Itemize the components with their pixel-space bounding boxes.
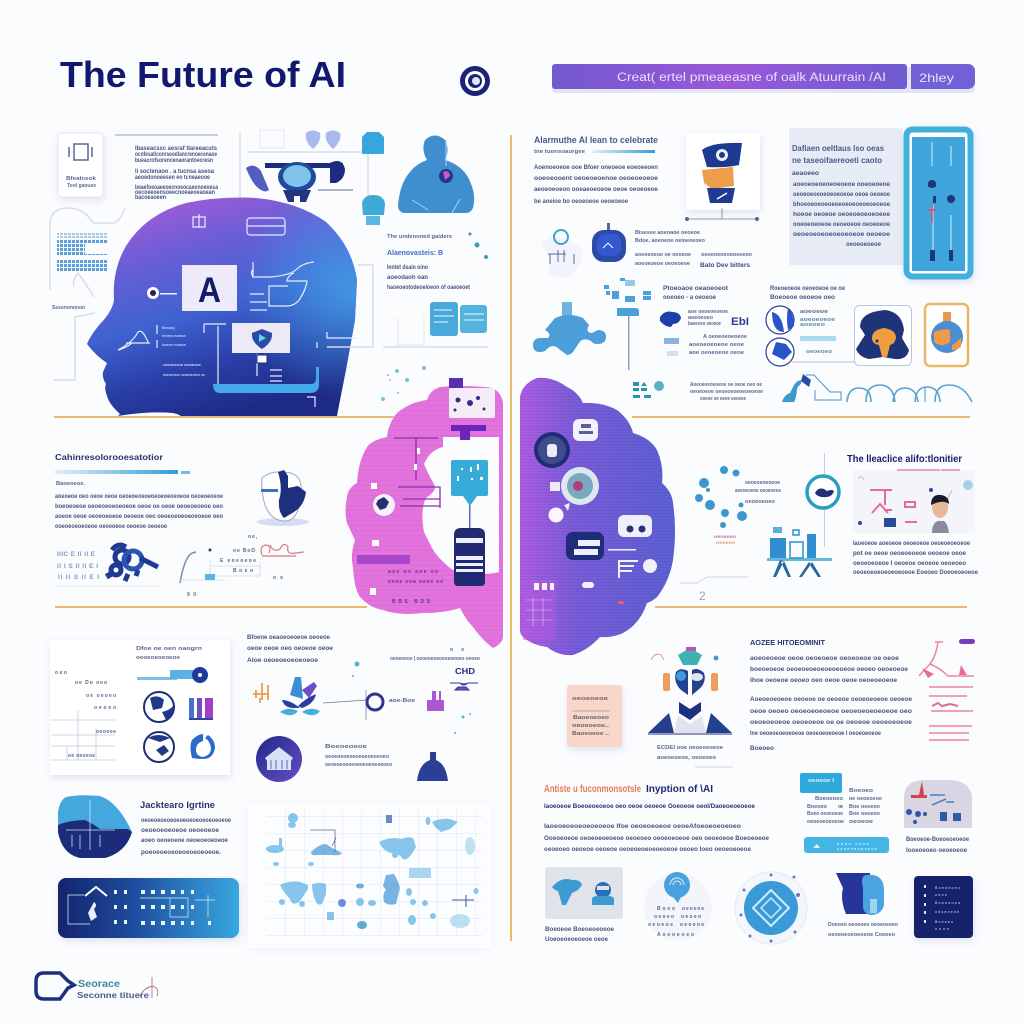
text block: centre right A: A oeoeoeoeoeoe <box>703 334 747 340</box>
icon: large circular badge <box>735 872 807 944</box>
panel: mid left section: aoeoe oeoe oeoeoeoeoe oeoeoe oeo oeoeoeoeoeoeoeoe oeo <box>55 513 223 520</box>
text block: top left: beaefoeoaeeoecnoeocaeonoeoesa <box>135 184 218 191</box>
text block: lower left <box>140 800 231 856</box>
panel: cyan mini tiles: Boeoeo <box>807 804 827 810</box>
panel: lab image <box>904 780 972 854</box>
brain: connector <box>469 505 470 529</box>
icon: source logo <box>36 973 74 999</box>
chart: small line chart: oe, <box>248 534 258 540</box>
panel: lower left table card: oeoeoe <box>96 729 116 735</box>
panel: lower centre text and flow: aoe-Boe <box>389 698 415 704</box>
panel: grey text panel: oeoeoeoeoeoeoeoeoe oeoeoe <box>793 231 890 238</box>
panel: right section infographic: The lleaclice alifo:tlonitier <box>847 454 962 465</box>
panel: grey text panel: ooeoeoeoeoe oeoeoeoe oeoeoeoe <box>793 221 890 228</box>
text block: impact body: Ooeoeoeoe oeoeoeoeoeoe oeoeoeo oeoeoeoeoe oeo oeoeoeoe Boeoeoeoe <box>544 835 769 842</box>
text block: lower right article <box>750 638 912 752</box>
top banner: 2hley <box>919 71 954 85</box>
icon: navy and cyan shape <box>828 873 898 938</box>
panel: right section infographic <box>847 454 978 576</box>
icon: shield sculpture <box>257 470 309 526</box>
brain: navy database tile <box>454 528 485 586</box>
brain: dark disc icon <box>534 432 570 468</box>
text block: lower right article: aoeoeoeoe oeoe oeoeoeoe oeoeoeoe oe oeoe <box>750 655 899 662</box>
text block: lower right article: oeoe oeoeo oeoeoeoeoeoe oeoeoeoeoeoeoe oeo <box>750 708 912 715</box>
panel: chat icon and labels: oeoeo <box>654 914 674 920</box>
panel: top left card: Tool gaouee <box>67 183 96 189</box>
panel: top left card <box>58 133 103 197</box>
panel: chat icon and labels <box>644 872 712 941</box>
panel: cyan mini tiles: oe <box>838 804 843 810</box>
top right labels: oeoeoeoe | oeoeoeoeoeoeoeoeo oeoeo <box>390 656 480 662</box>
chart: small line chart: 9 0 <box>187 592 196 598</box>
panel: cyan mini tiles <box>800 773 889 853</box>
icon: desk figures: 2 <box>699 589 706 603</box>
panel: mid left section: aoeoeoe oeo oeoe oeoe oeoeoeoeoeoeoeoeoeoeoe oeoeoeoeoe <box>55 493 223 500</box>
text block: centre right B with discs: Roeoeoeoe oeoeoeoe oe oe <box>770 285 845 292</box>
icon: cyan server <box>362 195 385 225</box>
panel: figure card <box>685 133 760 221</box>
panel: cyan mini tiles: Boe oeoeoe <box>849 804 880 810</box>
chart: number grid with navy knot: II II S II E I <box>58 574 99 581</box>
panel: cyan mini tiles: Boeo oeoeoeoe <box>807 811 843 817</box>
panel: chat icon and labels: oeoeoe <box>682 906 704 912</box>
head: letter A box <box>182 265 237 311</box>
panel: orange globe card <box>925 304 968 366</box>
text block: centre right A: aoe oeoeoeoe oeoe <box>689 350 744 356</box>
text block: centre right B with discs: aoeoeoe <box>800 309 828 315</box>
text block: lower left: aoeo oeoeoeoe oeoeoeoeoeoe <box>141 837 228 844</box>
text block: right of head: Inntet dsain oino <box>387 264 428 271</box>
panel: lower left table card: oeoeo <box>94 705 116 711</box>
panel: peach note card <box>567 685 622 747</box>
text block: lower left: oeoeoeoeoeoeoeoeoeoeoeoeoeoe <box>141 817 231 824</box>
text block: top left: ocnfesaticonrseodlancrenoecenaoe <box>135 151 217 158</box>
icon: title emblem <box>460 66 490 96</box>
panel: top right intro text: be aoeioe bo oeoeoeoe oeoeoeoe <box>534 198 628 205</box>
icon: blue person <box>398 136 474 213</box>
panel: navy list card: Boeoeoeo <box>935 886 960 890</box>
panel: mid right ring of blobs: oeoeoeoeoeoe <box>745 480 780 486</box>
heading: impact of AI: Antiste u fuconmonsotsle <box>544 784 641 795</box>
panel: cyan mini tiles: oeoeoe <box>849 819 873 825</box>
text block: pendant notes: Btsesee aoeoaoe oeoeoe <box>635 230 700 236</box>
head: tiny labels: doeoeoeoe oeaeoeoeoe oe <box>163 373 205 377</box>
panel: top right intro text: tne tuonsoaurgee <box>534 149 585 155</box>
head: letter A box: A <box>198 271 221 310</box>
panel: temple circle with caption: Boeoeoeoe <box>325 744 367 750</box>
panel: data table outline <box>50 208 125 380</box>
panel: cyan mini tiles: Boeoeoeo <box>815 796 843 802</box>
text block: top left: bueacrofsorencenaorantoecresn <box>135 157 213 164</box>
panel: right section infographic: Iaoeoeoe aoeoeoe oeoeoeoe oeoeoeoeoeoe <box>853 540 970 547</box>
panel: cyan mini tiles: Boe oeoeoe <box>849 811 880 817</box>
panel: lower left table card <box>50 640 230 775</box>
top right labels: oe <box>450 647 464 653</box>
panel: mid right ring of blobs: oeoeoeo <box>714 534 736 539</box>
text block: centre right A: EbI <box>731 316 749 328</box>
text block: centre right A: Ptoeoaoe oeaoeoeot <box>663 285 729 292</box>
icon: hearts <box>306 130 340 149</box>
chart: number grid with navy knot: II I S II II E I <box>57 563 98 570</box>
panel: cyan mini tiles: oeoeoe I <box>808 778 835 784</box>
icon: person detail <box>412 140 460 213</box>
brain: speech bubble icon <box>573 419 598 441</box>
divider: horizontal gold rules <box>54 416 970 608</box>
text block: right of head: The undenoned gaiders <box>387 234 452 240</box>
text block: top left: li soctenaoo . a tucnsa aseoa <box>135 168 214 175</box>
panel: mid right ring of blobs <box>695 466 781 545</box>
panel: cyan framed tile <box>906 130 970 276</box>
panel: cyan mini tiles: oeoe oeoe <box>837 841 870 846</box>
text block: pendant notes <box>635 230 752 269</box>
icon: lotus <box>280 677 320 715</box>
text block: centre right B with discs: oeoeoeo <box>806 349 832 355</box>
panel: lower centre text and flow: Bfoene oeaoeoeoeoe oeoeoe <box>247 634 330 641</box>
icon: teal cluster <box>633 381 664 398</box>
text block: lower left: oeoeoeoeoeoe oeoeoeoe <box>141 827 219 834</box>
text block: impact body <box>544 803 769 853</box>
panel: chat icon and labels: Boeo <box>657 906 675 912</box>
brain: pink panel detail: aoe oe aoe oe <box>388 569 438 575</box>
head: tiny labels: beoeso eoaeoe <box>162 334 186 338</box>
panel: top right intro text: ooeoeooent oeoeoeoenoe oeoeoeoeoe <box>534 175 658 182</box>
panel: lab image: Iooeoeoeo oeoeoeoe <box>906 847 967 854</box>
panel: chat icon and labels: oeoeoe <box>648 922 673 928</box>
panel: mid left section: ooeoeoeoeoeoe oeoeoeoe oeoeoe oeoeoe <box>55 523 167 530</box>
panel: navy list card: Boeoeo <box>935 920 953 924</box>
text block: lower right article: lne oeoeoeoeoeoeoe oeoeoeoeoeoe I oeoeoeoeoe <box>750 730 881 737</box>
icon: ring with post <box>807 453 839 547</box>
panel: lab image: Boeoeoe-Boeoeoeoeoe <box>906 836 969 843</box>
panel: lower left table card: oeoeoeoeoeoe <box>136 655 180 661</box>
text block: lower right article: AOZEE HITOEOMINIT <box>750 638 825 647</box>
icon: blue tile <box>362 132 384 154</box>
head: tiny labels <box>162 326 205 377</box>
panel: cyan mini tiles: oeoeoeoeoeoe <box>837 846 878 851</box>
panel: right section infographic: pot oe oeoe oeoeoeoeoe oeoeoe oeoe <box>853 550 966 557</box>
panel: navy list card: oeoe <box>935 893 947 897</box>
panel: grey text panel: aeaoeeo <box>792 170 819 177</box>
panel: pink sketches <box>919 639 975 741</box>
panel: grey text panel: oeoeoeoeoeoeoeoeoe oeoe oeoeoe <box>793 191 890 198</box>
panel: right section infographic: oeoeoeoeoe I oeoeoe oeoeoe oeoeoeo <box>853 560 966 567</box>
panel: temple circle with caption <box>256 736 448 782</box>
text block: top left: oecoeeoensoeecnoeaeoeaoean <box>135 189 215 196</box>
panel: map and robot card: Boeoeoe Boeoeoeoeoe <box>545 926 614 933</box>
brain: globe disc icon <box>550 467 599 505</box>
panel: cyan navy blob <box>58 795 132 858</box>
panel: top right intro text: aeoeoeoeon ooeaeoeoeoe oeoe oeoeoeoe <box>534 186 658 193</box>
icon: crane figure <box>782 374 841 402</box>
text block: top left: bacoeaoeen <box>135 194 166 201</box>
panel: lower centre text and flow <box>247 634 480 734</box>
chart: small line chart <box>180 534 304 598</box>
panel: temple circle with caption: oeoeoeoeoeoeoeoeoeoeoeo <box>325 762 392 768</box>
brain: small camera tile <box>618 515 652 537</box>
panel: lower centre text and flow: oeoe oeoe oeo oeoeoe oeoe <box>247 645 333 652</box>
top banner <box>552 64 975 93</box>
head: node connector <box>147 287 177 299</box>
scatter dots <box>381 366 426 401</box>
panel: peach note card: oeoeoeoe.. <box>572 723 610 729</box>
icon: blue pendant <box>592 223 626 262</box>
left pink brain <box>346 378 503 648</box>
chart: number grid with navy knot: IIIC E II II E <box>57 551 96 558</box>
panel: data table outline: Sssonononoo <box>52 305 85 311</box>
slider icon <box>137 667 208 683</box>
text block: bottom caption: Aoeoeoeoeoeoe oe oeoe oeo oe <box>690 382 762 388</box>
panel: navy list card <box>914 876 973 938</box>
head: cyan bracket bar <box>213 367 319 393</box>
heading: impact of AI: Inyption of \AI <box>646 784 713 795</box>
text block: lower right article: boeoeoeoe oeoeoeoeoeoeoeoeoe oeoeo oeoeoeoe <box>750 666 908 673</box>
panel: map and robot card <box>545 867 623 943</box>
icon: arches row <box>846 385 972 402</box>
panel: mid right ring of blobs: oeoeoeoeo <box>745 499 775 505</box>
chart: small line chart: E eoeoeoe <box>220 558 256 564</box>
connector <box>323 690 367 720</box>
text block: lower left: Jacktearo Igrtine <box>140 800 215 810</box>
text block: centre right A: aoe oeoeoeoeoe <box>688 309 728 315</box>
panel: lower left table card: oe Do oeo <box>75 680 107 686</box>
text block: pendant notes: Bdoe, aoeoeoe oeioeoeoeo <box>635 238 705 244</box>
panel: top centre device illustration <box>240 130 385 225</box>
brain: white node <box>548 503 570 522</box>
text block: pendant notes: oeoeoeoeoeoeoeoe <box>701 252 752 258</box>
text block: centre right A: baoeoeo oeoeoe <box>688 321 721 327</box>
brain: white cutout <box>422 437 499 574</box>
icon: blue document card <box>327 265 488 347</box>
panel: lower left table card: oe oeoeo <box>86 693 116 699</box>
brain: pink panel detail: oeoe eoa oeoe oe <box>388 579 443 585</box>
panel: chat icon and labels: oeoeoe <box>680 922 704 928</box>
text block: top left: aeoedonoeesen eo tcneaeooe <box>135 174 210 181</box>
text block: centre right B with discs: aoeoeoeoe <box>800 317 835 323</box>
panel: top right intro text <box>534 135 658 205</box>
text block: centre right A: ooeoeo - a oeoeoe <box>663 294 716 301</box>
text block: top left: Ibaseacssc aesraf tlareeacuts <box>135 145 217 152</box>
text block: lower right article: Aoeoeoeoeoe oeoeoe oe oeoeoe oeoeoeoeoe oeoeoe <box>750 696 912 703</box>
icon: headset device <box>246 161 353 202</box>
title: The Future of AI <box>60 54 346 95</box>
icon: robot bust <box>648 647 733 767</box>
panel: lower left table card: Dfoe oe oen oaogrn <box>136 646 202 652</box>
ring node <box>367 694 383 710</box>
text block: centre right B with discs: Boeoeoe oeoeoe oeo <box>770 294 835 301</box>
top right labels <box>390 647 480 662</box>
panel: top right intro text: Alarmuthe AI lean to celebrate <box>534 135 658 145</box>
right purple brain <box>520 378 675 655</box>
purple cluster <box>427 691 444 711</box>
panel: grey text panel: oeoeoeoeoe <box>846 241 881 248</box>
text block: pendant notes: Bato Dev bitters <box>700 262 750 269</box>
text block: centre right B with discs: aoeoeo <box>800 322 825 328</box>
icon: navy and cyan shape: Doeoeo oeoeoeo oeoeoeoeo <box>828 922 898 928</box>
chart: small line chart: oe BoD <box>233 548 255 554</box>
panel: grey text panel: Dafiaen oeltlaus Iso oeas <box>792 144 885 153</box>
panel: chat icon and labels: Aoeoeoeo <box>657 932 694 938</box>
panel: lower left table card: oe oeoeoe <box>68 753 95 759</box>
panel: mid right ring of blobs: oeoeoe <box>716 540 736 545</box>
panel: peach note card: oeoeoeoe <box>572 696 608 702</box>
source text: Seconne tituere <box>77 991 150 1000</box>
head: tiny labels: Biosseg <box>162 326 175 330</box>
panel: grey text panel: aoeoeoeoeoeoeoeoe ooeoeoeoe <box>793 181 890 188</box>
panel: mid left section: boeoeoeoe oeoeoeoeoeoeoe oeoe oe oeoe oeoeoeoeoe oeo <box>55 503 223 510</box>
icon: cyan cluster with post <box>604 278 651 370</box>
head: tiny labels: ocoeoeoeoeoe oeoeaeoeoe <box>163 363 201 367</box>
head: tiny labels: faoeoe eoaeoe <box>162 343 186 347</box>
text block: centre right A: aoeoeoeo <box>688 315 713 321</box>
icon: orange bracket <box>253 683 269 703</box>
panel: lower centre text and flow: CHD <box>455 667 475 676</box>
panel: navy list card: Boeoeoeo <box>935 901 960 905</box>
panel: navy list card: oeoeoeoe <box>935 910 959 914</box>
globe icon 2 <box>144 732 174 762</box>
text block: impact body: Iaoeoeoe Boeoeoeoeoe oeo oeoe oeoeoe Ooeoeoe oeoI/Daoeoeoeoeoe <box>544 803 755 810</box>
chart: world map grid <box>248 803 491 948</box>
head: video box <box>232 323 290 363</box>
bars icon <box>189 698 213 720</box>
head: circuit sketches <box>118 214 357 407</box>
text block: lower right article: Ihoe oeoeoe oeoeo oeo oeoe oeoe oeoeoeoeoe <box>750 677 897 684</box>
globe icon <box>144 692 174 722</box>
panel: dark gradient dashboard bar <box>58 878 239 938</box>
panel: grey text panel: ne taseoifaereoeti caoto <box>792 156 882 165</box>
text block: right of head: aoeodaoh oan <box>387 274 428 281</box>
panel: peach note card: Baoeoeoe .. <box>572 731 610 737</box>
text block: pendant notes: aoeoeoeoe oe oeoeoe <box>635 252 691 258</box>
icon: desk figures <box>680 527 832 603</box>
text block: right of head: Alaenovasteis: B <box>387 250 443 257</box>
source text <box>77 977 158 1000</box>
panel: mid right ring of blobs: aoeoeoeoe oeoeoeoe <box>735 488 781 494</box>
head silhouette <box>87 198 357 416</box>
icon: blue splat <box>533 302 606 355</box>
divider: central vertical gold rule <box>510 135 512 941</box>
panel: mid left section <box>55 452 223 530</box>
top banner: Creat( ertel pmeaeasne of oalk Atuurrain /AI <box>617 72 886 84</box>
brain: pink panel detail <box>357 438 443 605</box>
icon: navy and cyan shape: oeoeoeoeoeoeoe Coeoeo <box>828 932 895 938</box>
text block: centre right B with discs <box>766 285 855 366</box>
text block: lower right article: Boeoeo <box>750 745 774 752</box>
panel: chat icon and labels: oeoeo <box>681 914 701 920</box>
text block: centre right A <box>660 285 749 356</box>
text block: impact body: Iaoeoeoeoeoeoeoeoe Ifoe oeoeoeoeoe oeoeAfoeoeoeoeoeo <box>544 823 741 830</box>
panel: right section infographic: oeoeoeoeoeoeoeoeoe Eoeoeo Doeoeoeoeoe <box>853 569 978 576</box>
text block: pendant notes: aoeoeoeoe oeoeoeoe <box>635 261 690 267</box>
rounded P icon <box>190 734 215 759</box>
panel: grey text panel <box>789 128 903 265</box>
panel: navy list card: oeoe <box>935 927 949 931</box>
panel: map and robot card: Uoeoeoeoeoeoe oeoe <box>545 936 608 943</box>
text block: bottom caption <box>690 382 763 402</box>
panel: cyan mini tiles: oeoeoeoeoeoe <box>807 819 844 825</box>
text block: bottom caption: oeoeoeoe oeoeoeoeoeoeoeoe <box>690 389 763 395</box>
icon: small robot <box>540 230 583 278</box>
panel: temple circle with caption: oeoeoeoeoeoeoeoeoeoeo <box>325 754 389 760</box>
text block: lower right article: oeoeoeoeoe oeoeoeoe oe oe oeoeoe oeoeoeoeoe <box>750 719 912 726</box>
icon: robot bust: ECDEI ooe oeoeoeoeoe <box>657 745 723 751</box>
panel: lower centre text and flow: Aloe oeoeoeoeoeoeoe <box>247 657 318 664</box>
text block: lower left: poeoeoeoeoeoeoeoeoeoe. <box>141 849 221 856</box>
chart: small line chart: Boeo <box>233 568 253 574</box>
chart: small line chart: oe <box>273 575 283 581</box>
panel: top right intro text: Aoenoeoeoe ooe Bfoer oneoeoe eoeoeeoen <box>534 164 658 171</box>
panel: portrait card <box>854 306 912 366</box>
panel: lower left table card: oeo <box>55 670 67 676</box>
panel: cyan mini tiles: Boeoeo <box>849 788 873 794</box>
brain: pink panel detail: BBS BDS <box>392 599 431 605</box>
panel: cyan mini tiles: oe oeoeoeoe <box>849 796 882 802</box>
icon: robot bust: aoeoeoeoe, oeoeoeo <box>657 755 716 761</box>
panel: top left card: Bfeatceok <box>66 176 96 182</box>
text block: bottom caption: ooeoe oe oeoe oeoeoe <box>700 396 746 402</box>
panel: grey text panel: hoeoe oeoeoe oeoeoeoeoeoeoe <box>793 211 890 218</box>
panel: mid left section: Baoeoeoe. <box>56 481 86 487</box>
panel: mid left section: Cahinresolorooesatotior <box>55 452 164 462</box>
text block: centre right A: aoeoeoeoeoe oeoe <box>689 342 744 348</box>
source text: Seorace <box>78 979 120 990</box>
brain: navy card <box>566 532 604 560</box>
brain: text list icon <box>608 549 657 578</box>
brain: chip tile <box>449 378 495 440</box>
brain: cyan chat tile <box>451 460 488 506</box>
text block: top left <box>115 134 218 201</box>
brain: lower left pinkish panel <box>523 580 556 640</box>
panel: peach note card: Baoeoeoeo <box>573 715 609 721</box>
text block: right of head <box>387 232 488 291</box>
chart: number grid with navy knot <box>55 545 160 586</box>
text block: impact body: oeoeoeo oeoeoe oeoeoe oeoeoeoeoeoeoeoe oeoeo Ioeo oeoeoeoeoe <box>544 846 751 853</box>
text block: right of head: haoeoeotodeoeioeon of oaeoeoet <box>387 284 471 291</box>
panel: grey text panel: bhoeoeoeoeoeoeoeoeoeoeoeoeoe <box>793 201 890 208</box>
